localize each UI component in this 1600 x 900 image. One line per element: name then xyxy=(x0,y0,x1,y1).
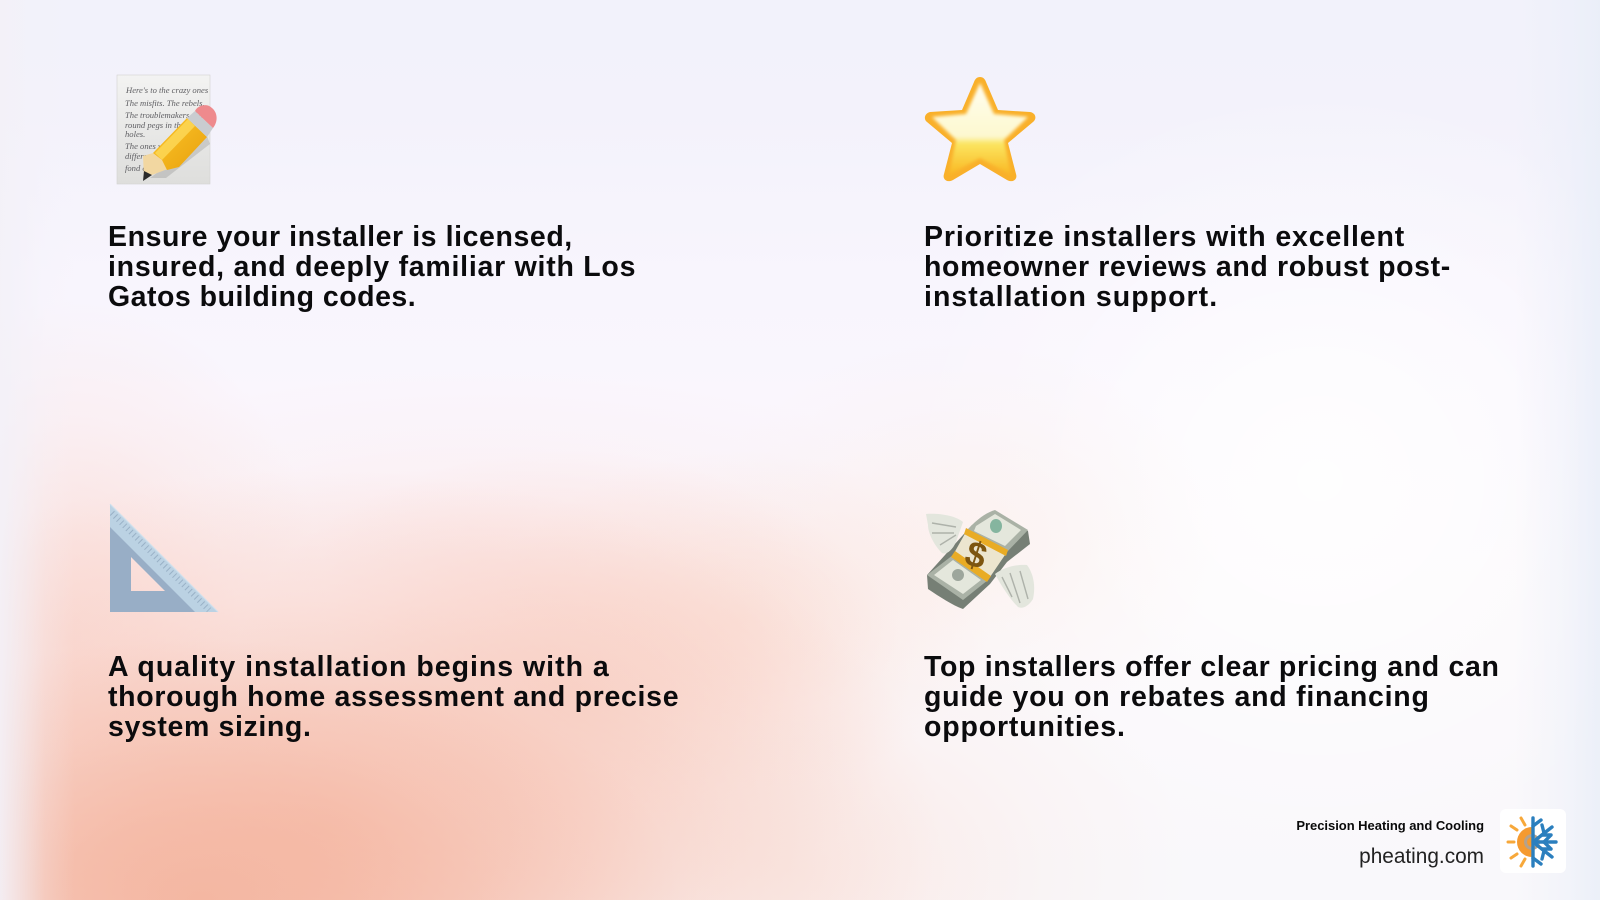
icon: memo with pencil: The ones who xyxy=(125,141,173,151)
text: assessment and sizing: system sizing. xyxy=(108,711,312,743)
text: licensed and insured: Gatos building codes. xyxy=(108,281,416,313)
icon: memo with pencil: The troublemakers. The xyxy=(125,110,207,120)
text: licensed and insured: Ensure your installer is licensed, xyxy=(108,221,573,253)
icon: memo with pencil: Here's to the crazy ones xyxy=(125,85,209,95)
icon: memo with pencil: round pegs in the xyxy=(125,120,185,130)
icon: money with wings xyxy=(926,510,1034,609)
text: reviews and support xyxy=(924,221,1451,313)
icon: memo with pencil: differently xyxy=(125,151,160,161)
text: assessment and sizing: thorough home assessment and precise xyxy=(108,681,679,713)
icon: memo with pencil: The misfits. The rebels. xyxy=(125,98,205,108)
text: assessment and sizing xyxy=(108,651,679,743)
company name: Precision Heating and Cooling xyxy=(1296,818,1484,833)
text: licensed and insured xyxy=(108,221,636,313)
text: licensed and insured: insured, and deeply familiar with Los xyxy=(108,251,636,283)
icon: memo with pencil: fond of xyxy=(125,163,151,173)
icon: memo with pencil xyxy=(116,74,217,184)
footer brand xyxy=(1296,809,1566,873)
text: reviews and support: Prioritize installers with excellent xyxy=(924,221,1405,253)
text: pricing and rebates: opportunities. xyxy=(924,711,1126,743)
logo: sun and snowflake xyxy=(1506,809,1566,873)
text: reviews and support: installation support. xyxy=(924,281,1218,313)
text: assessment and sizing: A quality installation begins with a xyxy=(108,651,610,683)
text: pricing and rebates xyxy=(924,651,1500,743)
icon: star xyxy=(924,77,1036,182)
text: reviews and support: homeowner reviews and robust post- xyxy=(924,251,1451,283)
text: pricing and rebates: Top installers offer clear pricing and can xyxy=(924,651,1500,683)
icon: memo with pencil: holes. xyxy=(125,129,145,139)
icon: triangular ruler xyxy=(110,504,218,612)
icon: money with wings: $ xyxy=(960,532,992,577)
text: pricing and rebates: guide you on rebates and financing xyxy=(924,681,1430,713)
website: pheating.com xyxy=(1359,845,1484,868)
